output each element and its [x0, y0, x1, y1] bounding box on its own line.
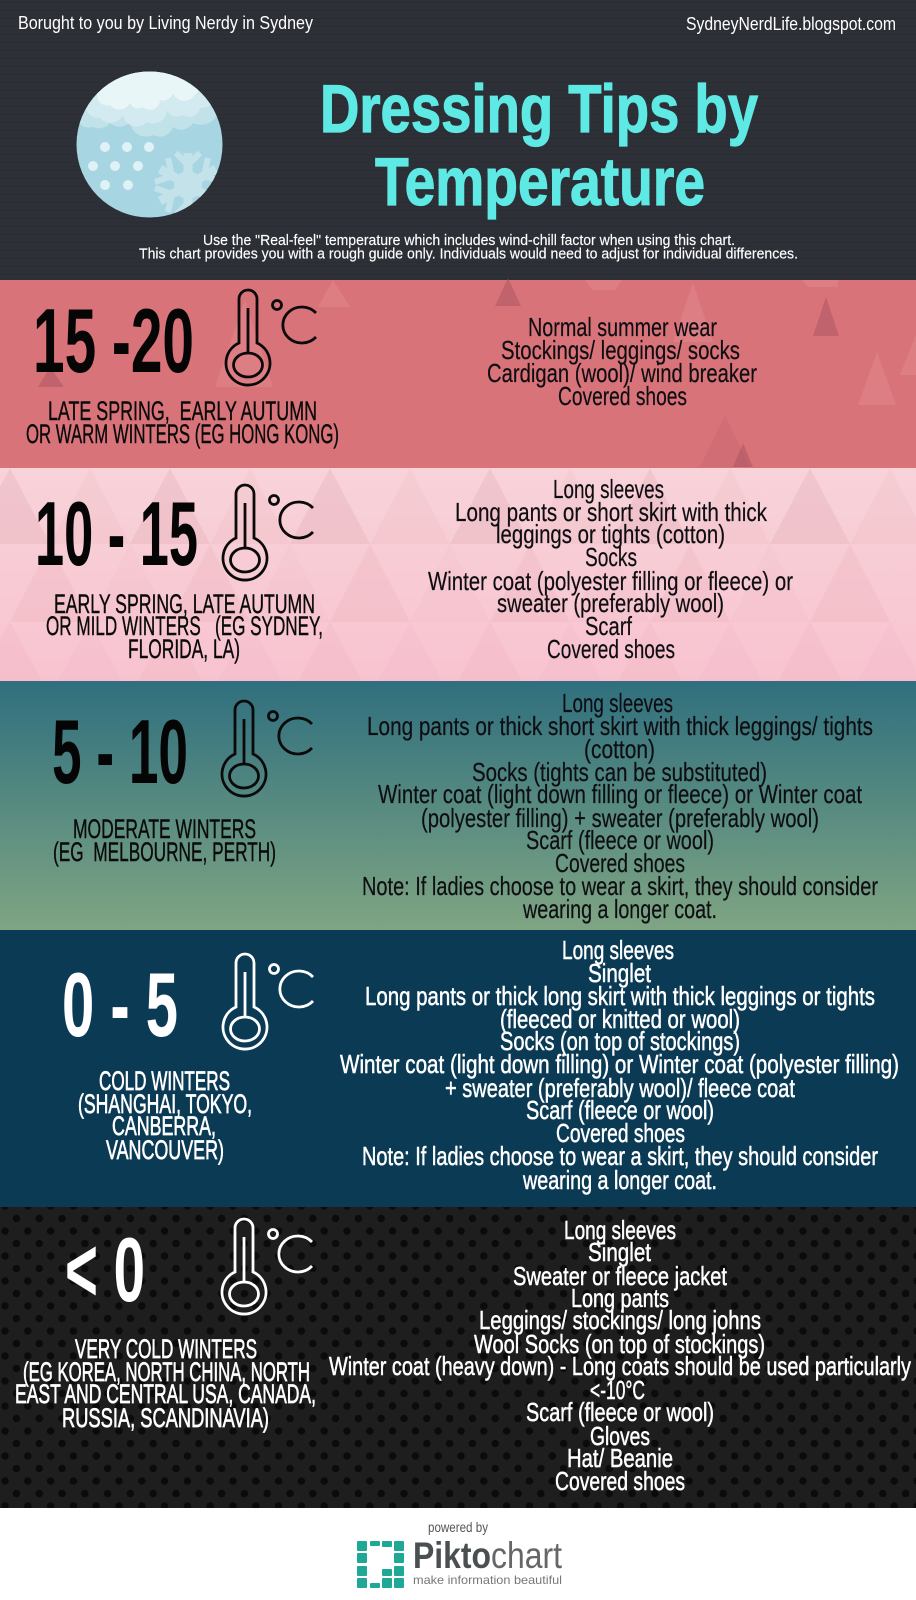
clothing list [362, 688, 878, 924]
clothing list [340, 935, 899, 1195]
clothing list: Covered shoes [555, 848, 685, 878]
clothing list: Gloves [590, 1421, 650, 1451]
climate description: OR WARM WINTERS (EG HONG KONG) [26, 419, 339, 449]
panel: 0 to 5 degrees [0, 930, 916, 1207]
clothing list: Normal summer wear [528, 312, 717, 342]
panel: 5 to 10 degrees [0, 681, 916, 931]
climate description: COLD WINTERS [99, 1066, 230, 1096]
panel: 10 to 15 degrees [0, 468, 916, 681]
clothing list: Singlet [588, 1237, 652, 1267]
climate description: (EG MELBOURNE, PERTH) [53, 837, 276, 867]
climate description: OR MILD WINTERS (EG SYDNEY, [46, 611, 323, 641]
title [320, 71, 758, 220]
clothing list: (fleeced or knitted or wool) [500, 1004, 740, 1034]
climate description: CANBERRA, [112, 1111, 216, 1141]
climate description: (EG KOREA, NORTH CHINA, NORTH [23, 1357, 310, 1387]
icon: thermometer celsius [222, 701, 312, 796]
temperature range: 10 - 15 [35, 484, 198, 585]
climate description [26, 396, 339, 449]
clothing list: Hat/ Beanie [567, 1443, 673, 1473]
climate description: (SHANGHAI, TOKYO, [78, 1089, 252, 1119]
temperature range: 0 - 5 [62, 955, 178, 1056]
climate description: VANCOUVER) [106, 1135, 224, 1165]
clothing list: Socks (tights can be substituted) [472, 757, 767, 787]
climate description: MODERATE WINTERS [73, 814, 256, 844]
clothing list: <-10°C [590, 1375, 645, 1405]
clothing list: Leggings/ stockings/ long johns [479, 1305, 761, 1335]
clothing list: Scarf [585, 611, 633, 641]
clothing list [487, 312, 757, 411]
panel: below 0 degrees [0, 1207, 916, 1508]
climate description [15, 1334, 316, 1433]
powered by text: powered by [428, 1519, 488, 1535]
clothing list: Socks (on top of stockings) [500, 1026, 740, 1056]
clothing list [428, 474, 793, 664]
climate description: EARLY SPRING, LATE AUTUMN [54, 589, 315, 619]
title: Temperature [375, 144, 705, 220]
credit text left: Borught to you by Living Nerdy in Sydney [18, 13, 313, 33]
clothing list: Cardigan (wool)/ wind breaker [487, 358, 757, 388]
icon: thermometer celsius [223, 485, 313, 580]
clothing list: Covered shoes [558, 381, 687, 411]
temperature range: < 0 [65, 1220, 145, 1321]
climate description: LATE SPRING, EARLY AUTUMN [48, 396, 317, 426]
clothing list: Long sleeves [562, 935, 674, 965]
climate description: RUSSIA, SCANDINAVIA) [62, 1403, 269, 1433]
climate description: EAST AND CENTRAL USA, CANADA, [15, 1379, 316, 1409]
climate description [46, 589, 323, 664]
piktochart wordmark: make information beautiful [413, 1573, 562, 1587]
clothing list: Covered shoes [556, 1118, 685, 1148]
clothing list: Long pants or short skirt with thick [455, 497, 768, 527]
clothing list: Scarf (fleece or wool) [526, 1095, 714, 1125]
icon: snow globe [76, 72, 222, 218]
clothing list [329, 1215, 911, 1496]
clothing list: Scarf (fleece or wool) [526, 1397, 714, 1427]
subtitle note: This chart provides you with a rough guide only. Individuals would need to adjust for individual differences. [139, 246, 798, 262]
clothing list: Scarf (fleece or wool) [526, 825, 714, 855]
clothing list: sweater (preferably wool) [497, 588, 724, 618]
climate description: VERY COLD WINTERS [75, 1334, 257, 1364]
climate description [53, 814, 276, 867]
clothing list: Stockings/ leggings/ socks [501, 335, 740, 365]
subtitle note: Use the "Real-feel" temperature which includes wind-chill factor when using this chart. [203, 232, 735, 249]
panel: footer [0, 1508, 916, 1600]
clothing list: wearing a longer coat. [522, 1165, 717, 1195]
clothing list: Winter coat (polyester filling or fleece) or [428, 566, 793, 596]
clothing list: Wool Socks (on top of stockings) [474, 1329, 765, 1359]
title: Dressing Tips by [320, 71, 758, 147]
piktochart wordmark: Piktochart [413, 1535, 563, 1576]
subtitle note [139, 232, 798, 262]
clothing list: leggings or tights (cotton) [496, 519, 725, 549]
clothing list: Long pants [571, 1283, 669, 1313]
clothing list: wearing a longer coat. [522, 894, 717, 924]
clothing list: Long sleeves [564, 1215, 676, 1245]
climate description: FLORIDA, LA) [128, 634, 240, 664]
icon: thermometer celsius [226, 290, 316, 385]
temperature range: 5 - 10 [52, 702, 188, 803]
clothing list: Covered shoes [555, 1466, 685, 1496]
clothing list: Long sleeves [553, 474, 664, 504]
climate description [78, 1066, 252, 1165]
clothing list: Singlet [588, 958, 652, 988]
icon: thermometer celsius [222, 1219, 312, 1314]
clothing list: + sweater (preferably wool)/ fleece coat [445, 1073, 796, 1103]
temperature range: 15 -20 [33, 291, 194, 392]
clothing list: (cotton) [584, 734, 655, 764]
clothing list: Sweater or fleece jacket [513, 1261, 728, 1291]
panel: 15 to 20 degrees [0, 278, 916, 468]
icon: piktochart logo [357, 1541, 404, 1588]
clothing list: Socks [585, 542, 637, 572]
icon: thermometer celsius [223, 954, 313, 1049]
clothing list: Covered shoes [547, 634, 675, 664]
panel: header [0, 0, 916, 280]
clothing list: Long sleeves [562, 688, 673, 718]
